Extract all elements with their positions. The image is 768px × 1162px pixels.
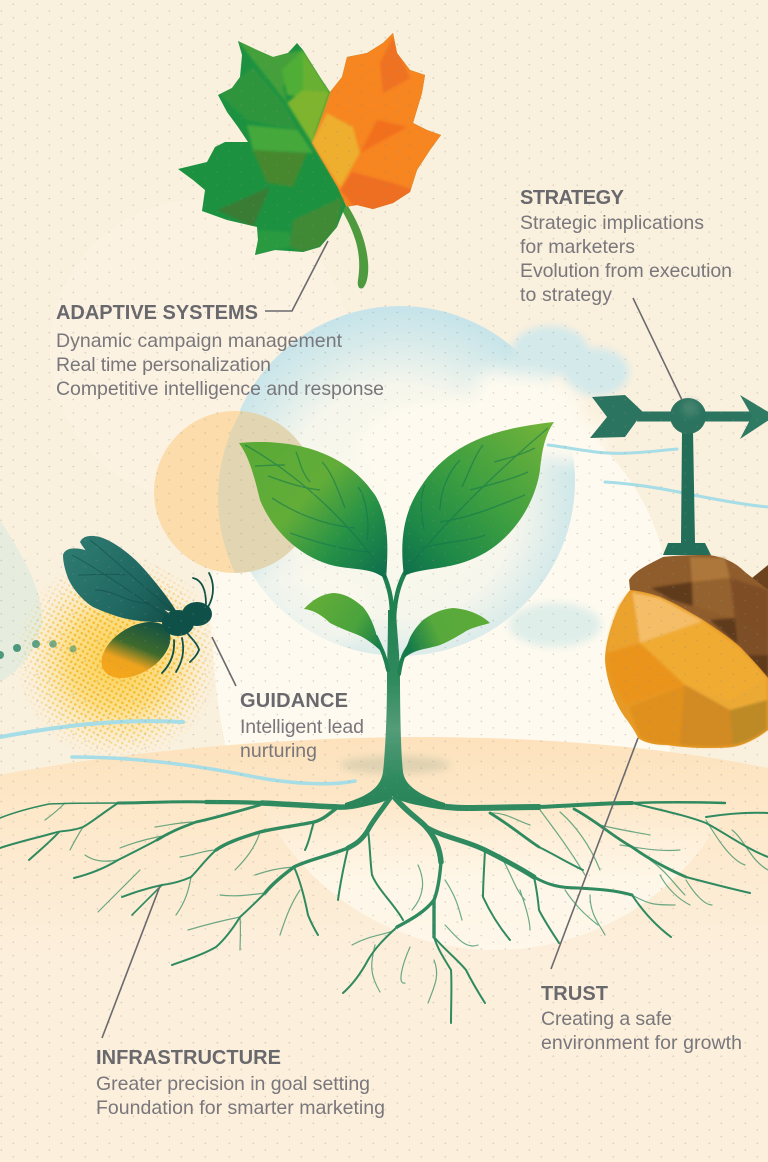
cloud: blue puff upper right <box>502 326 629 396</box>
label: infrastructure <box>96 1047 385 1119</box>
faint pale circle behind the adaptive systems label <box>50 200 350 500</box>
cloud: blue puff lower right <box>509 603 601 647</box>
label: strategy: for marketers <box>520 236 635 258</box>
soil shadow at stem base <box>340 756 450 774</box>
abdomen <box>92 610 180 690</box>
body facets <box>607 592 767 746</box>
label: trust <box>541 983 742 1054</box>
leader lines <box>102 241 682 1038</box>
faint green wedge at left edge <box>0 520 42 682</box>
thick root trunks <box>262 792 539 877</box>
vane post <box>681 430 695 543</box>
plant roots <box>0 792 768 1023</box>
label: strategy: to strategy <box>520 284 612 306</box>
thorax <box>162 610 194 636</box>
pale halo around the plant <box>210 380 670 840</box>
maple leaf <box>170 25 450 289</box>
legs and antennae <box>162 573 213 673</box>
label: adaptive systems <box>56 302 384 400</box>
vane base <box>663 543 711 555</box>
label: trust: TRUST <box>541 983 608 1005</box>
fine root twigs <box>45 803 768 1003</box>
label: adaptive systems: Dynamic campaign management <box>56 330 343 352</box>
head <box>182 602 212 626</box>
lighter circle below ground <box>235 430 755 950</box>
acorn <box>605 555 768 748</box>
wind lines <box>0 445 768 784</box>
label: trust: environment for growth <box>541 1032 742 1054</box>
wing veins <box>72 540 175 620</box>
label: adaptive systems: Real time personalization <box>56 354 271 376</box>
right large leaf <box>402 422 554 576</box>
firefly <box>63 536 213 690</box>
cap facets <box>651 557 768 680</box>
cloud: pale lower-left fade inside the circle <box>253 570 354 646</box>
small left leaf <box>304 593 384 654</box>
label: trust: Creating a safe <box>541 1008 672 1030</box>
sun overlap with sky circle <box>218 411 316 573</box>
stem branches <box>376 571 410 674</box>
faint pale patch at lower left edge <box>0 925 8 962</box>
left large leaf veins <box>245 445 385 575</box>
acorn cap <box>629 555 768 690</box>
ball highlight <box>682 400 698 416</box>
label: strategy: Evolution from execution <box>520 260 732 282</box>
small right leaf <box>400 608 490 662</box>
label: infrastructure: Greater precision in goal setting <box>96 1073 370 1095</box>
label: strategy <box>520 187 732 306</box>
acorn body <box>605 590 768 748</box>
acorn stem stub <box>752 565 768 590</box>
label: infrastructure: INFRASTRUCTURE <box>96 1047 281 1069</box>
pale panel behind the guidance label <box>212 610 670 775</box>
blue sky circle with clouds <box>225 306 629 656</box>
cloud: white mass inside the circle <box>360 371 605 500</box>
label: strategy: STRATEGY <box>520 187 625 209</box>
label: strategy: Strategic implications <box>520 212 704 234</box>
back wing <box>80 536 178 614</box>
left large leaf <box>239 442 387 580</box>
label: guidance: nurturing <box>240 740 317 762</box>
halftone glow behind firefly <box>16 559 220 758</box>
label: guidance <box>240 690 364 762</box>
head arrow <box>740 395 768 439</box>
label: infrastructure: Foundation for smarter marketing <box>96 1097 385 1119</box>
orange half <box>312 33 441 209</box>
right large leaf veins <box>405 428 548 572</box>
firefly trail dots <box>0 640 77 659</box>
label: guidance: GUIDANCE <box>240 690 348 712</box>
leaf body with facets <box>178 33 441 255</box>
leaf stem <box>339 200 368 289</box>
medium roots <box>118 802 725 937</box>
ground band <box>0 737 768 1162</box>
label: adaptive systems: Competitive intelligence and response <box>56 378 384 400</box>
main stem <box>345 610 445 809</box>
seedling plant <box>239 422 554 809</box>
facets <box>217 37 420 255</box>
label: guidance: Intelligent lead <box>240 716 364 738</box>
label: adaptive systems: ADAPTIVE SYSTEMS <box>56 302 258 324</box>
vane ball <box>670 398 706 434</box>
weather vane <box>590 395 768 555</box>
peach sun circle <box>154 411 316 573</box>
vane shaft <box>637 412 755 422</box>
front wing <box>63 548 178 622</box>
thin roots <box>0 803 768 1023</box>
tail arrow <box>590 395 643 438</box>
